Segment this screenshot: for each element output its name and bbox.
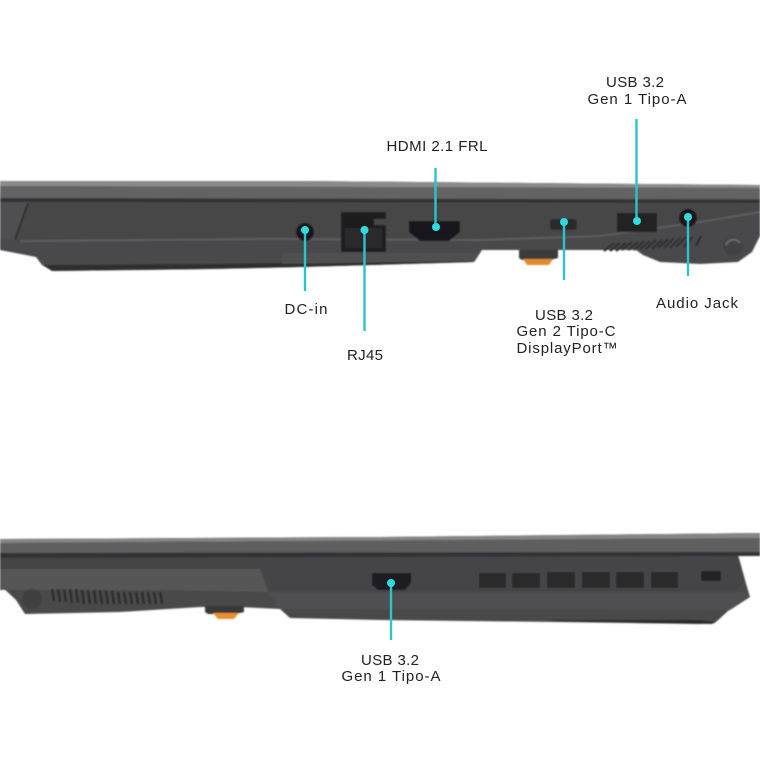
lock slot [701, 571, 721, 581]
laptop side view: right ports [0, 533, 760, 624]
DC-in port [296, 223, 314, 241]
callout: DC-in: DC-in [284, 301, 328, 318]
callout: USB 3.2 Gen 2 Tipo-C DisplayPort: USB 3.2 [535, 307, 593, 324]
callout: RJ45: RJ45 [347, 347, 383, 364]
power button [723, 236, 743, 256]
orange foot [205, 606, 244, 619]
callout: DC-in [284, 226, 328, 318]
callout: USB 3.2 Gen 2 Tipo-C DisplayPort: DisplayPort™ [516, 340, 618, 357]
callout: USB 3.2 Gen 1 Tipo-A top: Gen 1 Tipo-A [588, 91, 686, 108]
callout: RJ45 [347, 226, 383, 364]
power button [22, 589, 42, 609]
RJ45 port [341, 212, 386, 252]
vent slots [604, 236, 701, 251]
orange foot [519, 250, 558, 265]
callout: Audio Jack [656, 213, 738, 312]
USB-C port [550, 219, 577, 230]
callout: USB 3.2 Gen 2 Tipo-C DisplayPort: Gen 2 Tipo-C [516, 323, 616, 340]
audio jack port [679, 209, 697, 227]
callout: HDMI 2.1 FRL: HDMI 2.1 FRL [386, 138, 488, 155]
vent slots [52, 589, 162, 604]
laptop side view: left ports [0, 181, 760, 271]
callout: Audio Jack: Audio Jack [656, 295, 738, 312]
callout: USB 3.2 Gen 2 Tipo-C DisplayPort [516, 218, 618, 357]
callout: USB 3.2 Gen 1 Tipo-A top: USB 3.2 [606, 74, 664, 91]
HDMI port [409, 221, 460, 241]
callout: USB 3.2 Gen 1 Tipo-A bottom [342, 579, 440, 685]
exhaust vents [479, 572, 678, 588]
callout: USB 3.2 Gen 1 Tipo-A bottom: USB 3.2 [361, 652, 419, 669]
callout: USB 3.2 Gen 1 Tipo-A bottom: Gen 1 Tipo-A [342, 668, 440, 685]
USB-A port [372, 573, 411, 590]
USB-A port [617, 213, 657, 232]
callout: HDMI 2.1 FRL [386, 138, 488, 231]
callout: USB 3.2 Gen 1 Tipo-A top [588, 74, 686, 225]
